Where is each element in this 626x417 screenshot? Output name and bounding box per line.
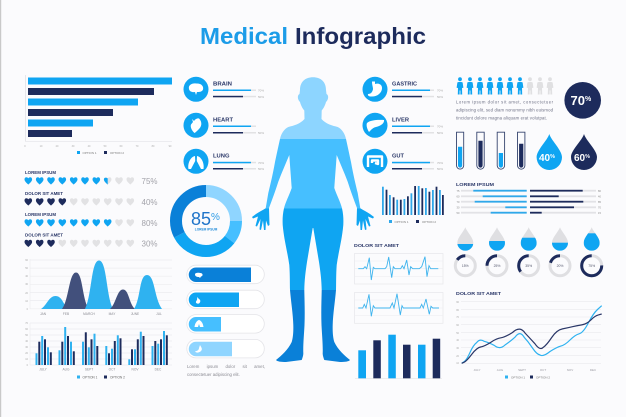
heart ratings: 80% xyxy=(142,219,158,228)
area chart: MARCH xyxy=(83,312,96,316)
organ stat: gastric: 50% xyxy=(437,95,443,99)
grouped column chart: 70 xyxy=(25,322,29,325)
line chart: DEC xyxy=(590,368,597,372)
grouped column chart: DEC xyxy=(155,368,162,372)
area chart: 10 xyxy=(25,300,29,303)
heart ratings: 30% xyxy=(142,240,158,248)
drop 40%: 40 xyxy=(539,153,550,164)
organ stat: gut xyxy=(362,149,443,174)
donut chart 85% xyxy=(176,191,236,251)
butterfly bars: 70 xyxy=(456,200,460,204)
area chart: JUL xyxy=(156,312,162,316)
percentage rings: 20% xyxy=(557,264,563,268)
line chart: SEPT xyxy=(518,368,526,372)
area chart: 50 xyxy=(25,267,29,270)
thin column chart: OPTION 1 xyxy=(394,220,409,224)
organ stat: lung: 50% xyxy=(258,167,264,171)
grouped column chart: OCT xyxy=(109,368,115,372)
horizontal bar chart: 80 xyxy=(152,145,155,148)
line chart: AUG xyxy=(497,368,504,372)
grouped column chart: OPTION 1 xyxy=(82,376,98,380)
drop 60%: 60 xyxy=(574,153,585,164)
organ stat: heart xyxy=(184,113,264,138)
area chart: JAN xyxy=(40,312,47,316)
line chart: OPTION 2 xyxy=(536,376,550,380)
butterfly bars: 60 xyxy=(456,194,460,198)
percentage rings: 35% xyxy=(525,264,532,268)
grouped column chart: 0 xyxy=(27,364,29,367)
paragraph text: tincidunt dolore magna aliquam erat volutpat. xyxy=(456,116,547,120)
organ stat: brain: BRAIN xyxy=(213,82,232,88)
organ stat: gastric: GASTRIC xyxy=(392,82,417,88)
test tubes xyxy=(456,132,525,169)
organ stat: brain: 50% xyxy=(258,95,264,99)
heart ratings xyxy=(24,170,158,248)
horizontal bar chart: 30 xyxy=(72,145,75,148)
heart ratings: 75% xyxy=(142,177,158,186)
progress pills xyxy=(187,265,264,358)
ECG chart 1 xyxy=(354,254,443,284)
paragraph text xyxy=(456,100,554,120)
caption under pills: Lorem ipsum dolor sit amet, xyxy=(187,364,265,369)
paragraph text: adipiscing elit, sed diam nonummy nibh euismod xyxy=(456,108,554,112)
grouped column chart: 20 xyxy=(25,352,29,355)
area chart: 60 xyxy=(25,259,29,262)
butterfly bars: 15 xyxy=(598,211,601,215)
line chart: 40 xyxy=(456,339,460,342)
drop 60%: % xyxy=(585,154,590,160)
line chart: 30 xyxy=(456,347,460,350)
area chart: MAY xyxy=(109,312,116,316)
organ stat: gut: 50% xyxy=(437,167,443,171)
area chart: 30 xyxy=(25,283,29,286)
horizontal bar chart xyxy=(24,75,172,155)
organ stat: lung: LUNG xyxy=(213,154,230,160)
grouped column chart: 10 xyxy=(25,358,29,361)
area chart: 40 xyxy=(25,275,29,278)
grouped column chart: OPTION 2 xyxy=(110,376,125,380)
organ stat: liver: 50% xyxy=(437,131,443,135)
70% circle xyxy=(564,82,601,119)
percentage rings: 75% xyxy=(588,264,595,268)
organ stat: liver: LIVER xyxy=(392,118,409,124)
heart ratings: LOREM IPSUM xyxy=(25,212,56,217)
ECG chart 2 xyxy=(354,292,443,323)
heart ratings: DOLOR SIT AMET xyxy=(25,191,63,196)
organ stat: heart: 50% xyxy=(258,131,264,135)
organ stat: brain: 70% xyxy=(258,88,264,92)
grouped column chart: NOV xyxy=(132,368,139,372)
butterfly bars: 50 xyxy=(456,211,460,215)
line chart: 90 xyxy=(456,301,460,304)
line chart: OPTION 1 xyxy=(511,376,525,380)
caption under pills: consectetuer adipiscing elit. xyxy=(187,372,240,377)
line chart: 50 xyxy=(456,332,460,335)
butterfly bars: 75 xyxy=(456,189,460,193)
donut chart 85%: % xyxy=(211,212,220,223)
70% circle: 70 xyxy=(570,93,585,108)
line chart: 80 xyxy=(456,309,460,312)
people pictogram xyxy=(457,77,553,94)
title xyxy=(200,23,426,49)
organ stat: heart: HEART xyxy=(213,118,234,124)
70% circle: % xyxy=(585,96,592,103)
area chart xyxy=(25,259,172,316)
organ stat: brain xyxy=(184,77,264,102)
human body figure xyxy=(252,77,374,362)
organ stat: lung: 70% xyxy=(258,161,264,165)
line chart: 20 xyxy=(456,355,460,358)
line chart: 60 xyxy=(456,324,460,327)
butterfly bars xyxy=(456,182,601,215)
horizontal bar chart: 70 xyxy=(136,145,139,148)
percentage rings: 15% xyxy=(462,264,469,268)
heart ratings: DOLOR SIT AMET xyxy=(25,232,63,238)
butterfly bars: 80 xyxy=(598,189,601,193)
percentage rings: 25% xyxy=(494,264,500,268)
area chart: JUNE xyxy=(131,312,139,316)
water drop row xyxy=(457,228,600,251)
horizontal bar chart: 90 xyxy=(169,145,172,148)
butterfly bars: 70 xyxy=(598,206,601,210)
donut chart 85%: LOREM IPSUM xyxy=(195,228,218,232)
thin column chart: OPTION 2 xyxy=(422,220,436,224)
grouped column chart: 60 xyxy=(25,328,29,331)
organ stat: liver: 70% xyxy=(437,124,443,128)
butterfly bars: 85 xyxy=(598,200,601,204)
drop 40%: % xyxy=(550,154,555,160)
horizontal bar chart: OPTION 1 xyxy=(82,151,97,155)
caption under pills xyxy=(187,364,265,377)
grouped column chart: AUG xyxy=(63,368,70,372)
organ stat: lung xyxy=(184,149,264,174)
horizontal bar chart: 50 xyxy=(104,145,107,148)
area chart: FEB xyxy=(63,312,69,316)
line chart: NOV xyxy=(567,368,573,372)
organ stat: gut: 70% xyxy=(437,161,443,165)
area chart: 20 xyxy=(25,292,29,295)
organ stat: liver xyxy=(362,113,443,138)
donut chart 85%: 85 xyxy=(191,209,211,229)
grouped column chart: 50 xyxy=(25,334,29,337)
butterfly bars: 40 xyxy=(598,194,601,198)
butterfly bars: 30 xyxy=(456,206,460,210)
title: Infographic xyxy=(295,23,426,49)
paragraph text: Lorem ipsum dolor sit amet, consectetuer xyxy=(456,100,554,104)
horizontal bar chart: OPTION 2 xyxy=(110,151,124,155)
grouped column chart: JULY xyxy=(39,368,48,372)
grouped column chart: 40 xyxy=(25,340,29,343)
percentage rings xyxy=(455,256,602,276)
horizontal bar chart: 0 xyxy=(24,145,26,148)
line chart: 70 xyxy=(456,316,460,319)
grouped column chart: SEPT xyxy=(85,368,93,372)
heart ratings: 40% xyxy=(142,198,158,207)
title: Medical xyxy=(200,23,288,49)
organ stat: gastric: 70% xyxy=(437,88,443,92)
line chart: 10 xyxy=(456,362,460,365)
thin column chart xyxy=(382,186,444,224)
organ stat: gastric xyxy=(362,77,443,102)
area chart: 0 xyxy=(27,308,29,311)
drop 40% xyxy=(537,134,562,170)
butterfly bars: LOREM IPSUM xyxy=(456,182,494,188)
organ stat: gut: GUT xyxy=(392,154,405,160)
column chart bottom xyxy=(355,335,442,379)
line chart: JULY xyxy=(473,368,481,372)
horizontal bar chart: 40 xyxy=(88,145,91,148)
ECG panel heading: DOLOR SIT AMET xyxy=(354,243,399,249)
line chart xyxy=(456,291,602,380)
horizontal bar chart: 10 xyxy=(40,145,43,148)
horizontal bar chart: 20 xyxy=(56,145,59,148)
horizontal bar chart: 60 xyxy=(120,145,123,148)
drop 60% xyxy=(571,134,597,170)
heart ratings: LOREM IPSUM xyxy=(25,170,56,175)
grouped column chart xyxy=(25,322,172,380)
line chart: DOLOR SIT AMET xyxy=(456,291,501,297)
grouped column chart: 30 xyxy=(25,346,29,349)
line chart: OCT xyxy=(540,368,546,372)
